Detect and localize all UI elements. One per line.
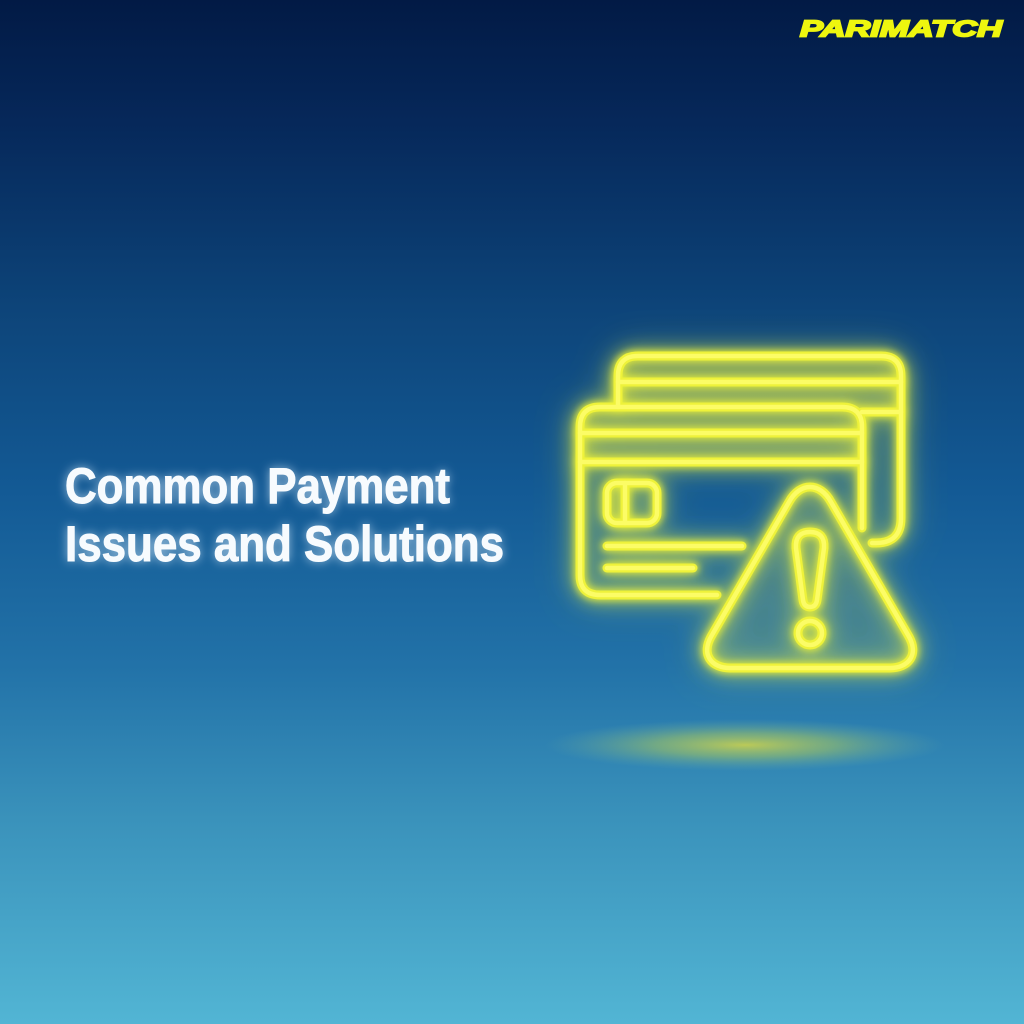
- icon: credit cards with warning triangle: [580, 356, 913, 668]
- floor glow beneath icon: [545, 719, 945, 771]
- logo: PARIMATCH: PARIMATCH: [800, 16, 1003, 42]
- title: Common Payment Issues and Solutions: [65, 458, 504, 572]
